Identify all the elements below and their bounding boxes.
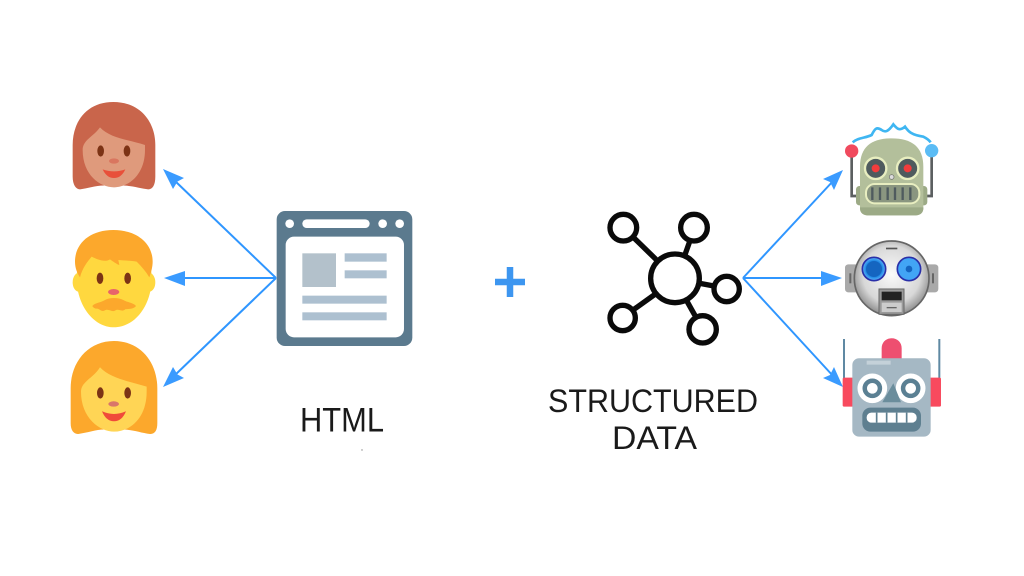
label: STRUCTURED DATA: STRUCTURED — [548, 383, 758, 419]
icon: woman with auburn hair — [73, 102, 155, 189]
arrows: HTML to people — [163, 169, 276, 387]
label: STRUCTURED DATA: DATA — [612, 420, 698, 456]
mark: tiny dot — [361, 449, 363, 451]
icon: woman with orange hair — [71, 341, 157, 434]
icon: man with moustache — [73, 230, 155, 327]
icon: structured data network — [610, 214, 739, 343]
icon: plus sign — [495, 267, 525, 297]
icon: silver round robot — [845, 241, 938, 316]
arrows: structured data to robots — [743, 170, 843, 387]
icon: web page — [277, 211, 412, 346]
label: STRUCTURED DATA — [548, 383, 758, 456]
label: HTML: HTML — [300, 402, 384, 440]
icon: blue-grey robot with red light — [843, 338, 941, 437]
icon: green robot with electric arc — [845, 124, 938, 215]
